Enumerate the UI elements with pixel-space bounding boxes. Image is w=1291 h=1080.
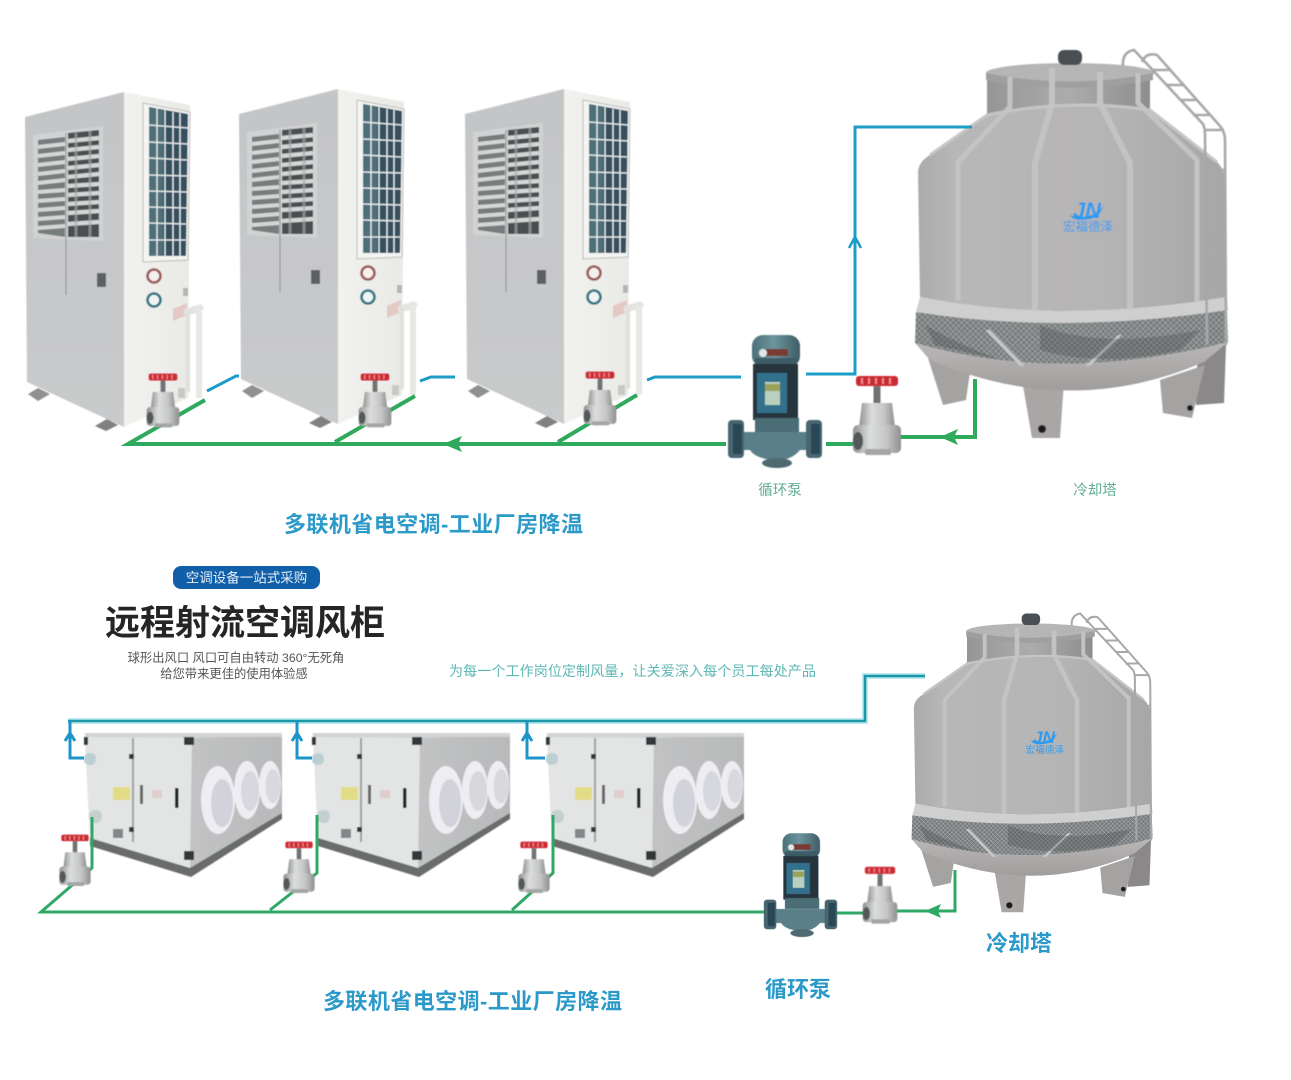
arrow: green left tower: [940, 429, 958, 445]
pill badge: 空调设备一站式采购: [186, 570, 307, 586]
ahu 1: [84, 733, 282, 877]
label: pump bottom: 循环泵: [765, 977, 831, 1002]
label: tower bottom: 冷却塔: [986, 931, 1052, 956]
pump bottom: [764, 833, 837, 937]
subtitle lines: 给您带来更佳的使用体验感: [160, 666, 308, 681]
valves bottom: [59, 835, 897, 924]
green supply pipes top: [128, 379, 975, 444]
label: tower top: 冷却塔: [1073, 482, 1117, 499]
label: pump top: 循环泵: [758, 482, 802, 499]
cooling tower top: [915, 50, 1228, 438]
subtitle lines: [128, 650, 344, 681]
ahu 2: [312, 733, 510, 877]
main title: 远程射流空调风柜: [105, 604, 385, 643]
arrow: green left bottom: [925, 904, 941, 918]
green pipes bottom: [41, 815, 955, 913]
blue pipes bottom: [65, 676, 925, 758]
ahu 3: [546, 733, 744, 877]
pill badge: [173, 566, 320, 589]
unit: air conditioner 1: [25, 92, 202, 431]
unit: air conditioner 2: [239, 89, 416, 428]
cooling tower bottom: [912, 614, 1153, 912]
arrow: green left top main: [443, 436, 462, 452]
pump top: [728, 335, 822, 468]
subtitle lines: 球形出风口 风口可自由转动 360°无死角: [128, 650, 344, 665]
heading bottom: 多联机省电空调-工业厂房降温: [323, 989, 622, 1014]
valves top row: [147, 372, 901, 455]
slogan: 为每一个工作岗位定制风量，让关爱深入每个员工每处产品: [449, 663, 816, 679]
unit: air conditioner 3: [465, 89, 642, 428]
blue return pipes top: [207, 127, 972, 391]
heading top: 多联机省电空调-工业厂房降温: [284, 512, 583, 537]
